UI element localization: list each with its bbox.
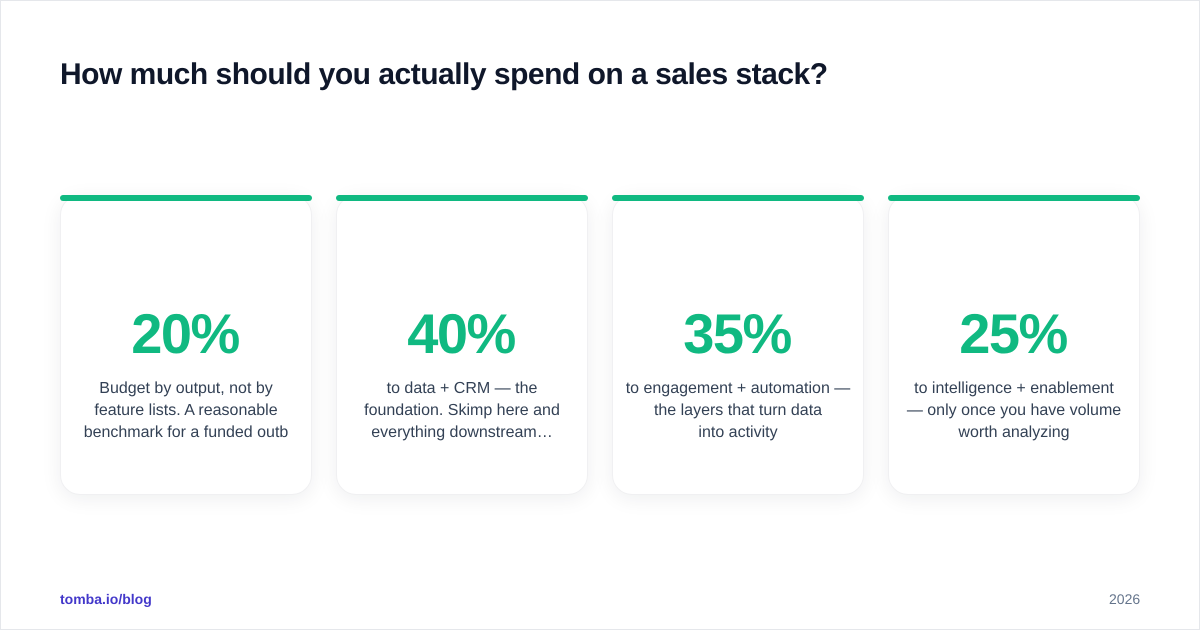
description [906, 380, 1121, 441]
description [84, 380, 288, 441]
panel: 40% card [336, 195, 588, 499]
description: foundation. Skimp here and [364, 402, 560, 419]
panel: 35% card [612, 195, 864, 499]
description: worth analyzing [958, 424, 1070, 441]
description: to engagement + automation — [626, 380, 850, 397]
description: benchmark for a funded outb [84, 424, 288, 441]
footer: year: 2026 [1109, 591, 1140, 607]
description: to data + CRM — the [387, 380, 537, 397]
title: How much should you actually spend on a sales stack? [60, 58, 828, 91]
description: Budget by output, not by [99, 380, 273, 397]
description [364, 380, 560, 441]
footer: brand link: tomba.io/blog [60, 591, 152, 607]
stat: 25%: 25% [959, 302, 1067, 365]
description: — only once you have volume [907, 402, 1121, 419]
stat: 20%: 20% [131, 302, 239, 365]
panel: 25% card [888, 195, 1140, 499]
accent bar [60, 195, 312, 201]
accent bar [888, 195, 1140, 201]
panel: 20% card [60, 195, 312, 499]
description: everything downstream… [371, 424, 553, 441]
accent bar [336, 195, 588, 201]
stat: 35%: 35% [683, 302, 791, 365]
accent bar [612, 195, 864, 201]
description: feature lists. A reasonable [94, 402, 278, 419]
description [626, 380, 850, 441]
description: the layers that turn data [654, 402, 822, 419]
description: to intelligence + enablement [914, 380, 1114, 397]
description: into activity [698, 424, 778, 441]
stat: 40%: 40% [407, 302, 515, 365]
